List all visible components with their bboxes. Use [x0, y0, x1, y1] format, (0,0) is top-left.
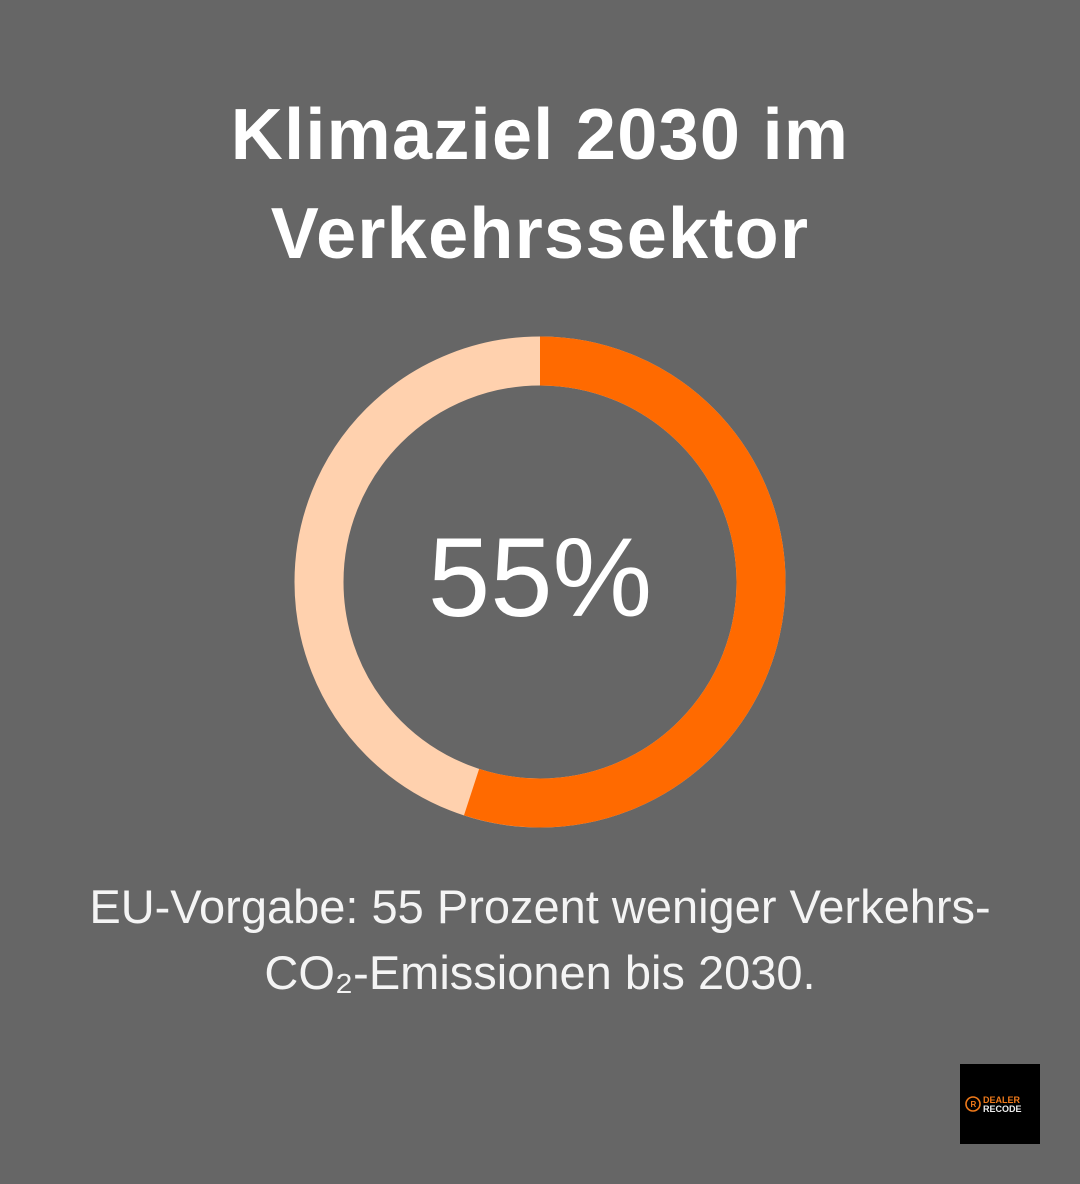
caption: [89, 880, 991, 999]
title: Verkehrssektor: [271, 194, 809, 274]
logo: DEALER: [983, 1095, 1021, 1105]
logo: R: [970, 1100, 976, 1109]
logo: [960, 1064, 1040, 1144]
title: [231, 95, 849, 274]
logo: RECODE: [983, 1104, 1022, 1114]
title: Klimaziel 2030 im: [231, 95, 849, 175]
donut chart: 55%: [428, 515, 652, 640]
caption: CO₂-Emissionen bis 2030.: [264, 946, 816, 999]
caption: EU-Vorgabe: 55 Prozent weniger Verkehrs-: [89, 880, 991, 933]
